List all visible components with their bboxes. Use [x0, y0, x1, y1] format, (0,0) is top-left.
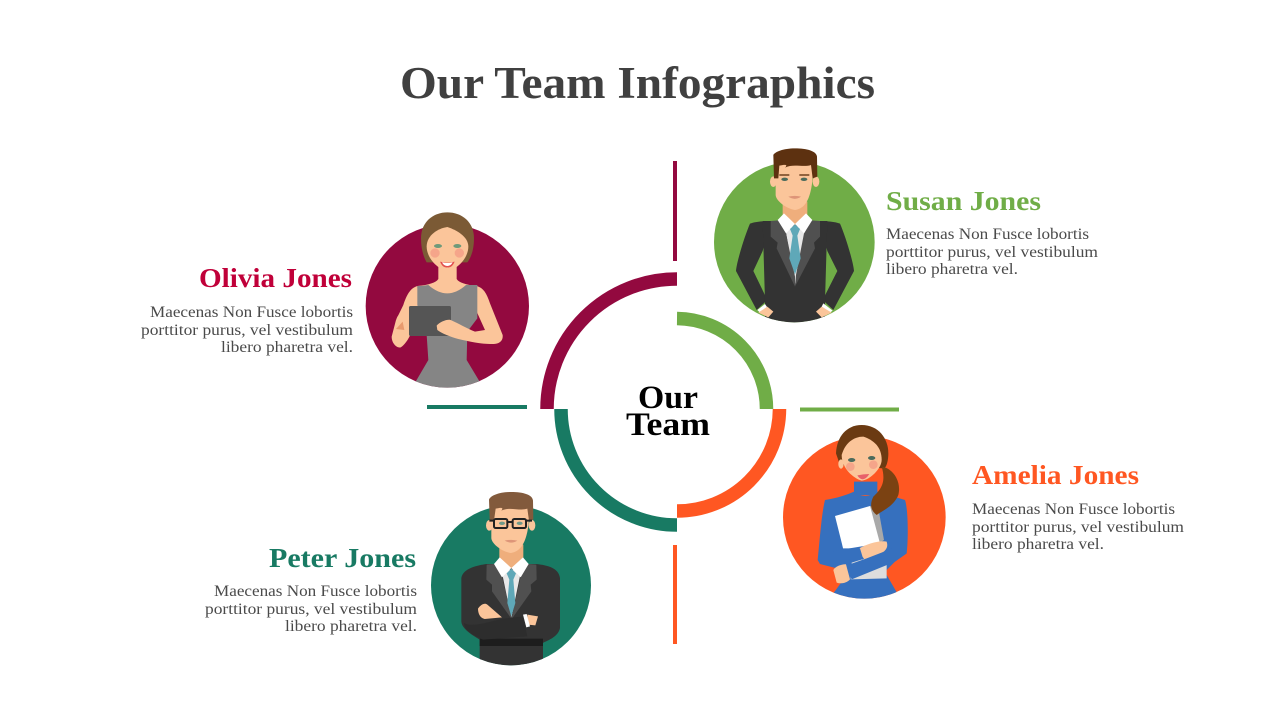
name: Susan Jones: Susan Jones — [886, 185, 1041, 216]
description: Susan Jones: Maecenas Non Fusce lobortis — [886, 226, 1089, 243]
description: Olivia Jones: libero pharetra vel. — [221, 339, 353, 356]
arc: teal — [561, 409, 677, 525]
arc: green — [677, 318, 767, 409]
description: Amelia Jones: Maecenas Non Fusce lobortis — [972, 501, 1175, 518]
connector: orange bar — [673, 545, 677, 644]
arc: orange — [677, 409, 780, 511]
description: Amelia Jones: libero pharetra vel. — [972, 536, 1104, 553]
description: Olivia Jones: porttitor purus, vel vestibulum — [141, 322, 354, 339]
name: Peter Jones: Peter Jones — [269, 542, 416, 573]
center label: Team — [626, 407, 710, 443]
description: Amelia Jones: porttitor purus, vel vestibulum — [972, 519, 1185, 536]
center ring chart — [547, 279, 780, 525]
portrait: Olivia Jones — [366, 212, 529, 392]
name: Amelia Jones: Amelia Jones — [972, 459, 1139, 490]
description: Susan Jones: libero pharetra vel. — [886, 261, 1018, 278]
connector: green bar — [800, 408, 899, 412]
portrait: Peter Jones — [431, 492, 591, 668]
description: Amelia Jones — [972, 501, 1185, 553]
title: Our Team Infographics — [400, 58, 875, 108]
portrait: Susan Jones — [714, 148, 875, 325]
description: Olivia Jones — [141, 304, 354, 356]
connector: teal bar — [427, 405, 527, 409]
description: Peter Jones: porttitor purus, vel vestibulum — [205, 601, 418, 618]
connector: maroon bar — [673, 161, 677, 261]
center label: Our — [638, 380, 698, 416]
description: Peter Jones: libero pharetra vel. — [285, 618, 417, 635]
description: Olivia Jones: Maecenas Non Fusce lobortis — [150, 304, 353, 321]
description: Susan Jones: porttitor purus, vel vestibulum — [886, 244, 1099, 261]
description: Susan Jones — [886, 226, 1099, 278]
arc: maroon — [547, 279, 677, 409]
name: Olivia Jones: Olivia Jones — [199, 262, 352, 293]
portrait: Amelia Jones — [783, 425, 946, 603]
description: Peter Jones: Maecenas Non Fusce lobortis — [214, 583, 417, 600]
description: Peter Jones — [205, 583, 418, 635]
center label — [626, 380, 710, 443]
